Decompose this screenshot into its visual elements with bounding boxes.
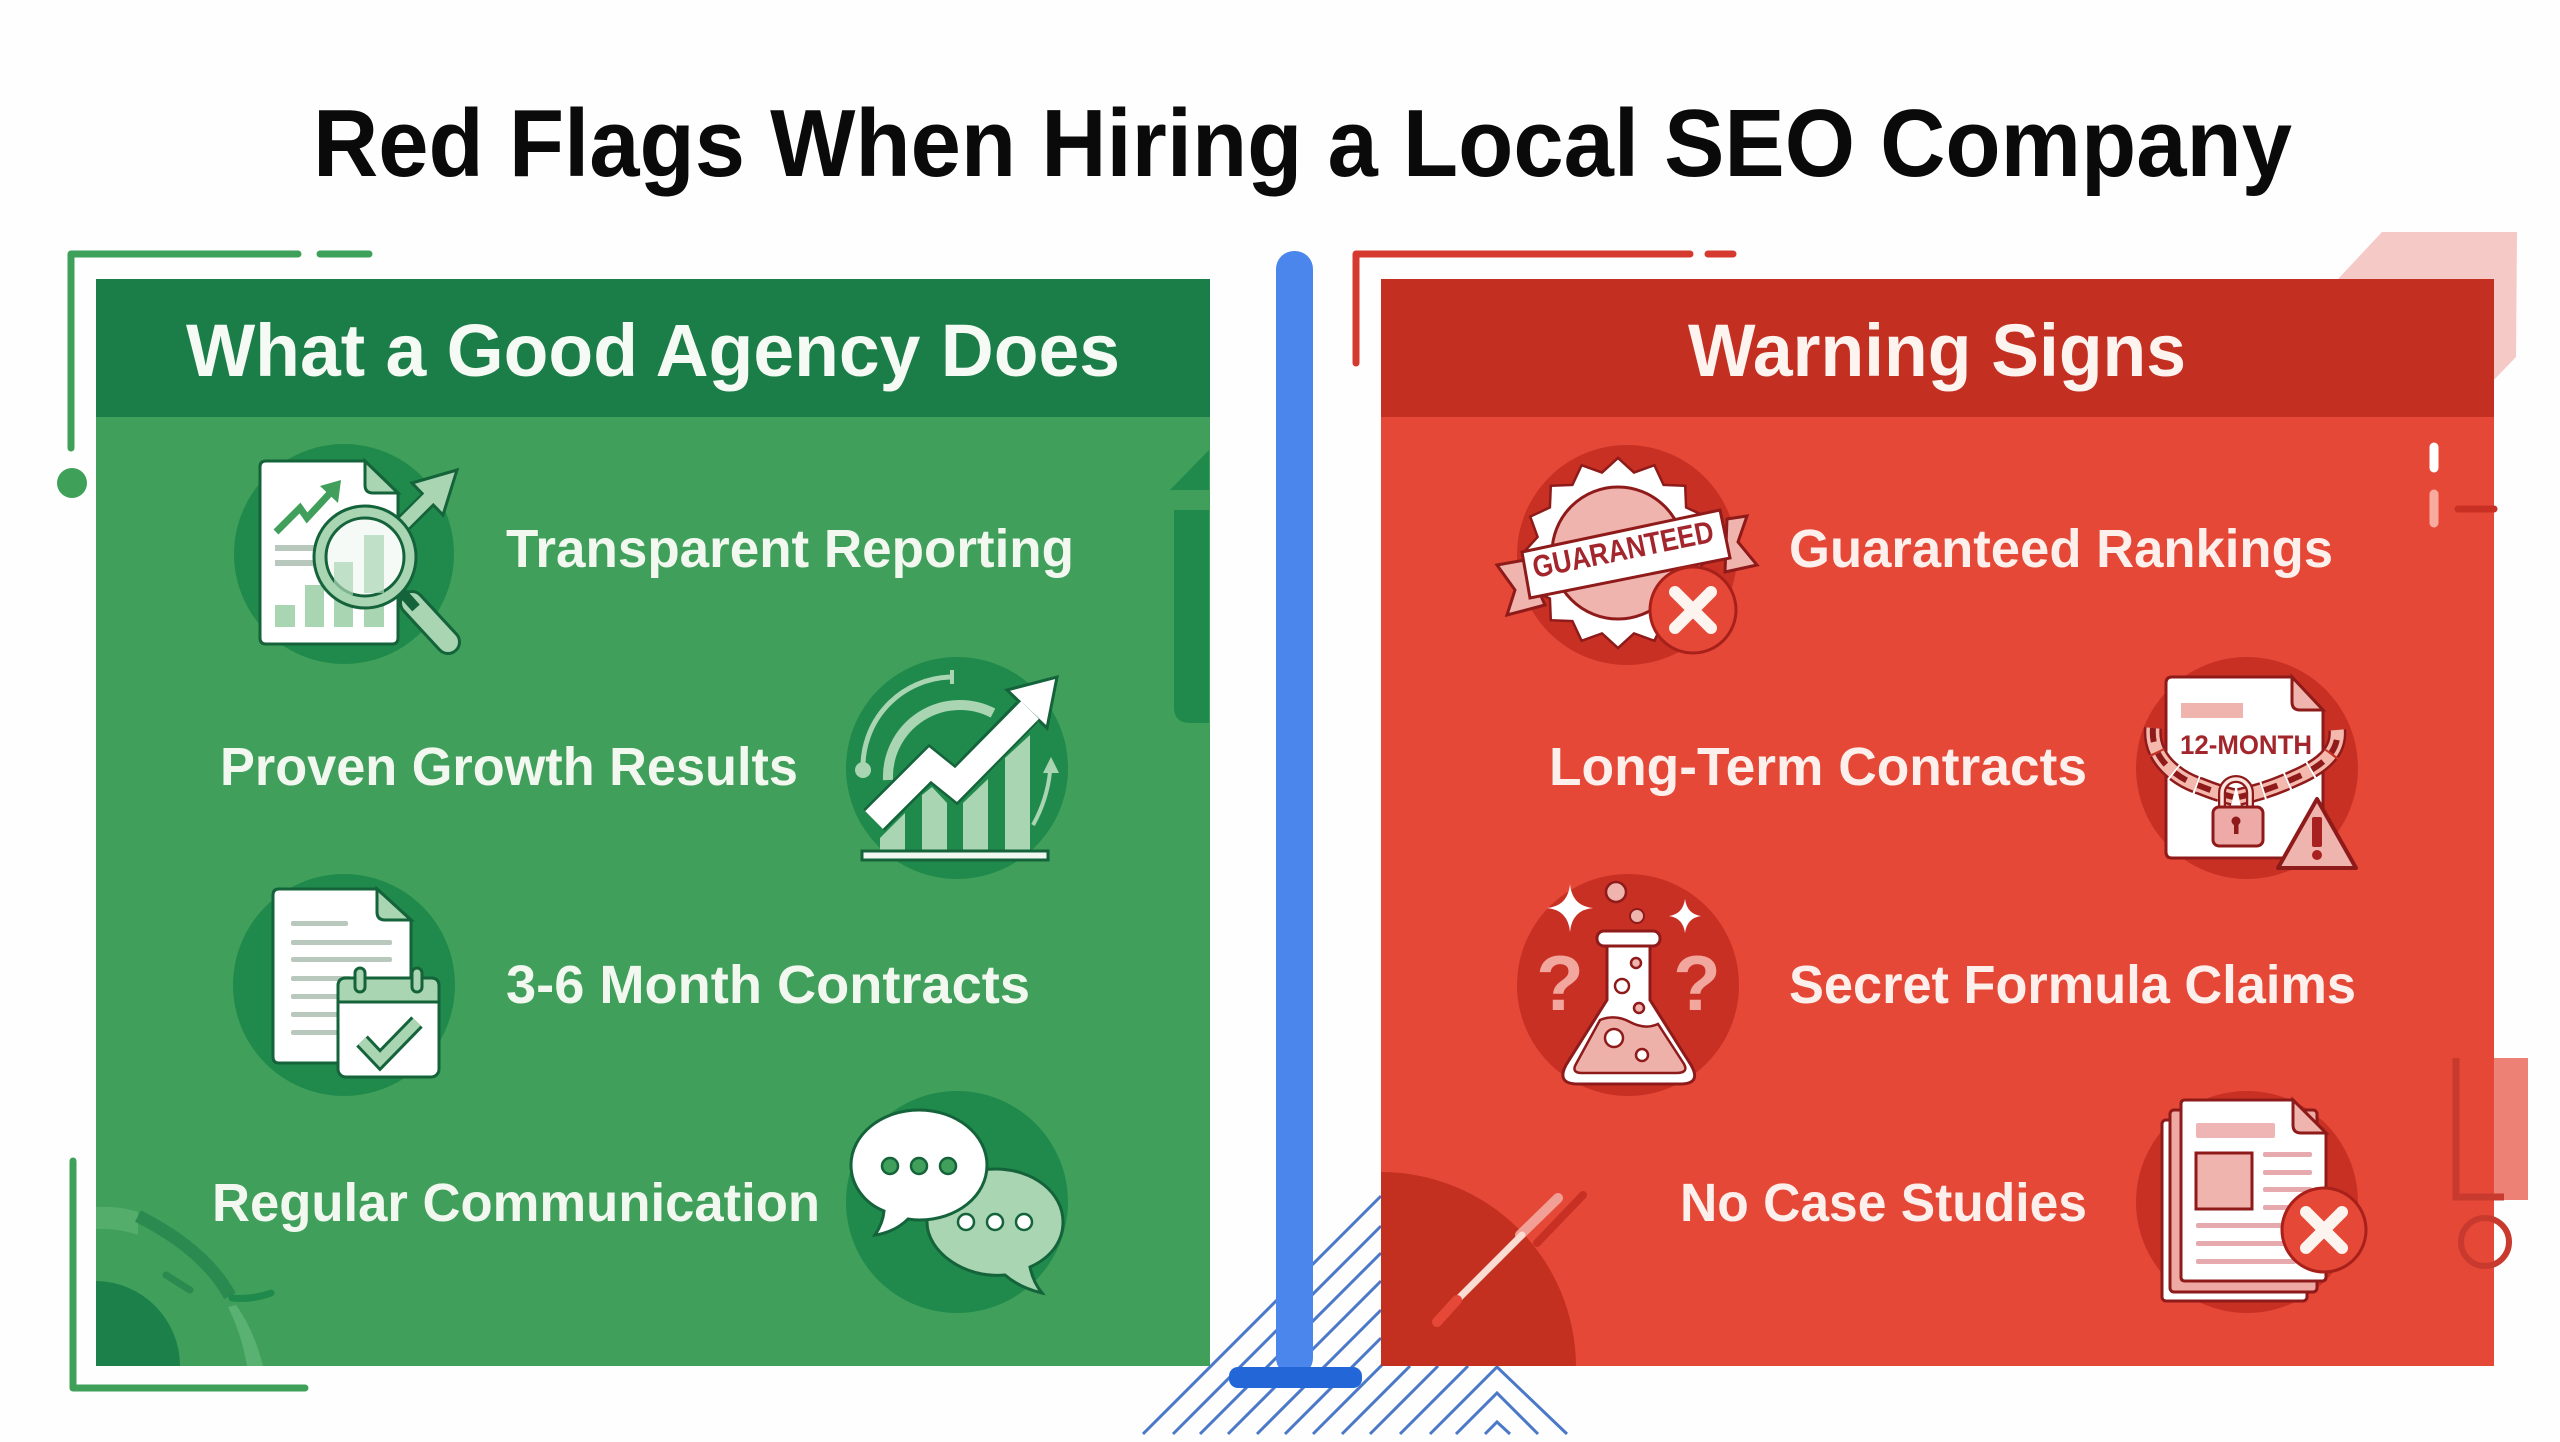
- icon: chained contract: 12-MONTH: [2180, 730, 2312, 760]
- item label: Proven Growth Results: [220, 737, 798, 797]
- panel: warning signs: [1381, 279, 2509, 1366]
- panel decoration: corner arcs: [96, 1207, 271, 1366]
- item label: No Case Studies: [1680, 1173, 2087, 1233]
- divider base: [1229, 1367, 1362, 1388]
- panel decoration: dark house tab: [1170, 450, 1209, 723]
- panel decoration: corner quarter circle: [1381, 1172, 1576, 1366]
- icon: speech bubbles: [846, 1091, 1068, 1313]
- panel decoration: lower-right bracket: [2456, 1058, 2504, 1197]
- icon: chained contract: [2136, 657, 2358, 879]
- decoration: pink corner shape behind warning panel: [2338, 232, 2517, 384]
- icon: guaranteed badge: [1497, 445, 1757, 665]
- decoration: pink block at lower right: [2494, 1058, 2528, 1200]
- item label: Secret Formula Claims: [1789, 955, 2356, 1015]
- decoration: green top-left bracket: [71, 254, 369, 448]
- decoration: green bottom-left bracket: [73, 1161, 305, 1388]
- panel heading: Warning Signs: [1688, 309, 2186, 392]
- decoration: red top-left bracket: [1356, 254, 1733, 363]
- item label: 3-6 Month Contracts: [506, 955, 1030, 1015]
- panel decoration: diagonal streaks: [1437, 1195, 1583, 1322]
- panel decoration: short dashes: [2434, 447, 2494, 523]
- panel header band: [96, 279, 1210, 417]
- icon: growth chart: [846, 657, 1068, 879]
- item label: Long-Term Contracts: [1549, 737, 2087, 797]
- icon: guaranteed badge: GUARANTEED: [1529, 514, 1717, 585]
- icon: secret formula flask: [1517, 874, 1739, 1096]
- decoration: green dot: [57, 468, 87, 498]
- icon: contract with calendar: [233, 874, 455, 1096]
- icon: secret formula flask: ?: [1536, 939, 1584, 1027]
- icon: no case studies: [2136, 1091, 2366, 1313]
- icon: report with magnifier: [234, 444, 457, 664]
- panel: what a good agency does: [96, 279, 1210, 1366]
- item label: Guaranteed Rankings: [1789, 519, 2333, 579]
- panel decoration: ring: [2461, 1218, 2509, 1266]
- blue hatch pattern: [1143, 1196, 1567, 1434]
- title: Red Flags When Hiring a Local SEO Company: [313, 90, 2292, 197]
- item label: Regular Communication: [212, 1173, 820, 1233]
- icon: secret formula flask: ?: [1673, 939, 1721, 1027]
- panel heading: What a Good Agency Does: [186, 309, 1120, 392]
- item label: Transparent Reporting: [506, 519, 1074, 579]
- panel header band: [1381, 279, 2494, 417]
- center divider: blue bar: [1229, 251, 1362, 1388]
